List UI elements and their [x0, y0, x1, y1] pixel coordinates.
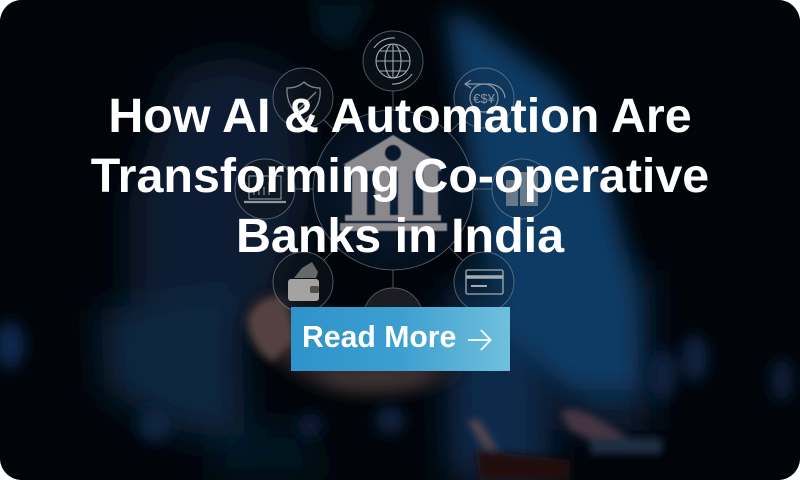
central glow — [313, 110, 473, 270]
icon: laptop chart — [244, 176, 286, 202]
title: Banks in India — [236, 209, 564, 263]
button label: Read More — [302, 321, 456, 354]
title: How AI & Automation Are — [108, 89, 692, 143]
icon: shield — [287, 82, 320, 120]
icon: arrow — [468, 329, 492, 351]
icon: wallet — [288, 262, 319, 301]
icon: documents — [506, 172, 538, 206]
icon: currency exchange: €$¥ — [473, 91, 496, 106]
title: Transforming Co-operative — [91, 149, 709, 203]
icon: credit card — [466, 270, 503, 294]
icon: currency exchange — [465, 80, 505, 112]
hand — [248, 294, 460, 394]
icon network lines — [235, 31, 552, 348]
icon: globe — [374, 38, 412, 84]
title — [91, 89, 709, 263]
icon: bank building — [340, 135, 447, 231]
button: read more — [291, 307, 510, 371]
